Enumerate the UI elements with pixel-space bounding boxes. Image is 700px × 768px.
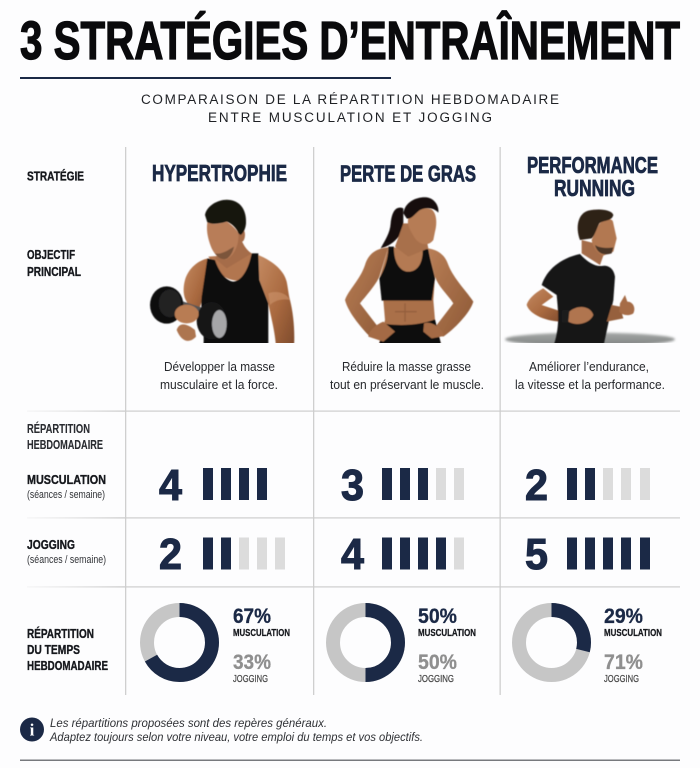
objective text: musculaire et la force. — [160, 378, 278, 392]
percentages: 71% — [604, 651, 643, 674]
musculation count 3: 3 — [341, 461, 364, 510]
subtitle — [141, 92, 559, 125]
objective text: la vitesse et la performance. — [515, 378, 665, 392]
percentages — [604, 605, 662, 685]
percentages: 50% — [418, 651, 457, 674]
row label: jogging: JOGGING — [27, 538, 75, 552]
objective text — [160, 360, 278, 392]
percentages: JOGGING — [418, 673, 454, 685]
jogging count 2: 2 — [159, 530, 182, 579]
panel: performance running — [505, 152, 675, 685]
icon: info — [20, 718, 44, 742]
percentages: MUSCULATION — [418, 627, 476, 639]
photo: woman hands on hips — [345, 197, 473, 347]
musculation bars — [382, 468, 464, 500]
jogging bars — [203, 538, 285, 570]
percentages: MUSCULATION — [233, 627, 290, 639]
row label: musculation: (séances / semaine) — [27, 489, 105, 501]
jogging bars — [567, 538, 650, 570]
row label: répartition du temps: RÉPARTITION — [27, 626, 94, 641]
panel: hypertrophie — [147, 160, 294, 685]
row label: musculation: MUSCULATION — [27, 473, 106, 487]
row label: répartition hebdomadaire — [27, 421, 103, 452]
heading: performance running — [527, 152, 658, 201]
musculation bars — [203, 468, 267, 500]
donut chart 50/50 — [333, 610, 398, 675]
row label: objectif principal — [27, 248, 81, 279]
heading: hypertrophie: HYPERTROPHIE — [152, 160, 287, 186]
row label: répartition du temps — [27, 626, 108, 673]
musculation bars — [567, 468, 650, 500]
jogging bars — [382, 538, 464, 570]
row label: musculation — [27, 473, 106, 501]
row label: répartition hebdomadaire: RÉPARTITION — [27, 421, 90, 436]
icon: info: i — [30, 720, 35, 740]
percentages — [418, 605, 476, 685]
jogging count 4: 4 — [341, 530, 364, 579]
footnote: Adaptez toujours selon votre niveau, votre emploi du temps et vos objectifs. — [49, 730, 423, 744]
percentages: MUSCULATION — [604, 627, 662, 639]
percentages: 29% — [604, 605, 643, 628]
objective text: tout en préservant le muscle. — [330, 378, 484, 392]
percentages — [233, 605, 290, 685]
musculation count 2: 2 — [525, 461, 548, 510]
row label: répartition hebdomadaire: HEBDOMADAIRE — [27, 438, 103, 452]
jogging count 5: 5 — [525, 530, 548, 579]
objective text — [330, 360, 484, 392]
row label: jogging — [27, 538, 106, 566]
percentages: 33% — [233, 651, 271, 674]
row label: stratégie: STRATÉGIE — [27, 168, 84, 184]
row label: objectif principal: PRINCIPAL — [27, 265, 81, 279]
objective text — [515, 360, 665, 392]
subtitle: COMPARAISON DE LA RÉPARTITION HEBDOMADAIRE — [141, 92, 559, 107]
photo: man curling dumbbell — [150, 200, 294, 347]
row label: répartition du temps: HEBDOMADAIRE — [27, 659, 108, 673]
percentages: 67% — [233, 605, 271, 628]
row label: répartition du temps: DU TEMPS — [27, 643, 80, 657]
objective text: Développer la masse — [164, 360, 275, 374]
heading: perte de gras: PERTE DE GRAS — [340, 160, 476, 186]
objective text: Améliorer l’endurance, — [529, 360, 649, 374]
donut chart 67/33 — [147, 610, 212, 675]
row label: objectif principal: OBJECTIF — [27, 248, 75, 262]
heading: performance running: RUNNING — [554, 175, 635, 201]
title underline — [20, 77, 391, 79]
donut chart 29/71 — [519, 610, 584, 675]
percentages: JOGGING — [233, 673, 268, 685]
percentages: JOGGING — [604, 673, 639, 685]
percentages: 50% — [418, 605, 457, 628]
subtitle: ENTRE MUSCULATION ET JOGGING — [208, 110, 492, 125]
musculation count 4: 4 — [159, 461, 182, 510]
panel: perte de gras — [330, 160, 484, 685]
row label: jogging: (séances / semaine) — [27, 554, 106, 566]
objective text: Réduire la masse grasse — [342, 360, 471, 374]
bottom rule — [20, 760, 680, 761]
footnote: Les répartitions proposées sont des repères généraux. — [50, 716, 327, 730]
footnote — [49, 716, 423, 744]
photo: runner — [505, 209, 675, 347]
